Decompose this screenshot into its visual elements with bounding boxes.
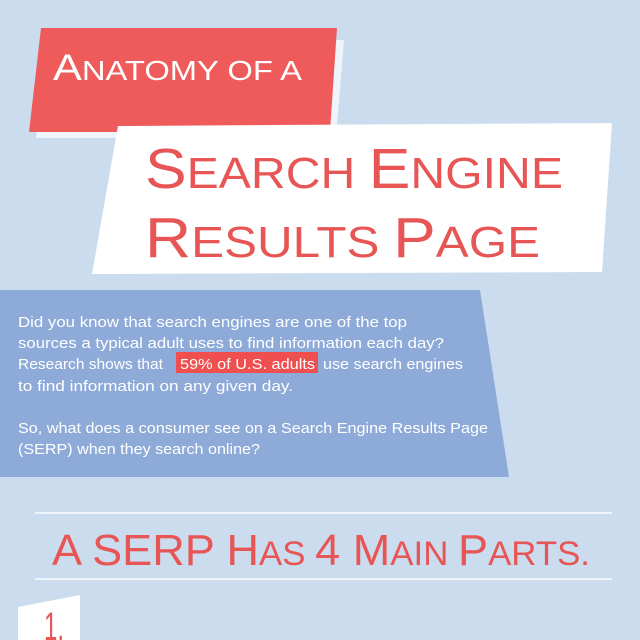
intro text: sources a typical adult uses to find information each day? (18, 336, 444, 352)
banner: anatomy of a (29, 28, 344, 138)
intro text: 59% of U.S. adults (180, 357, 315, 373)
highlight: 59% of U.S. adults (176, 352, 318, 373)
number badge 1 (18, 595, 80, 640)
banner: main title (92, 123, 612, 274)
intro text: to find information on any given day. (18, 379, 293, 395)
heading: results page: RESULTS PAGE (145, 206, 540, 270)
heading: anatomy of a: ANATOMY OF A (53, 47, 302, 88)
intro text: use search engines (323, 357, 463, 373)
intro text: Did you know that search engines are one of the top (18, 315, 407, 331)
intro text (18, 315, 488, 458)
heading: a serp has 4 main parts: A SERP HAS 4 MAIN PARTS. (52, 526, 590, 575)
intro text: Research shows that (18, 357, 163, 373)
intro panel (0, 290, 509, 477)
intro text: (SERP) when they search online? (18, 442, 260, 458)
intro text: So, what does a consumer see on a Search Engine Results Page (18, 421, 488, 437)
heading: search engine: SEARCH ENGINE (145, 137, 563, 201)
